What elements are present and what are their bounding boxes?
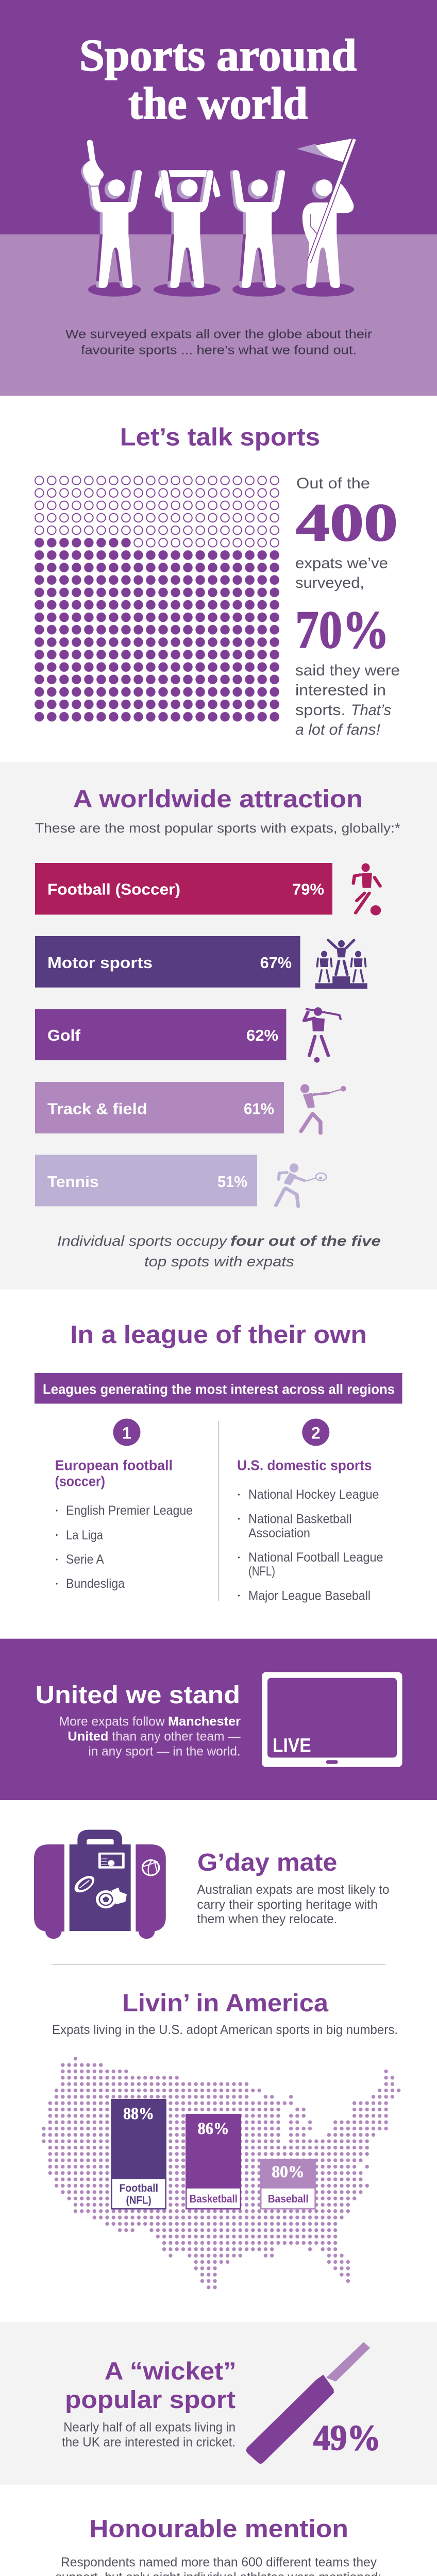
waffle chart: 400 expats (33, 474, 281, 723)
icon: tennis player (276, 1163, 326, 1207)
icon: footballer (354, 863, 381, 916)
heading: popular sport (65, 2386, 236, 2414)
stat text: That’s (351, 702, 391, 719)
bar: football NFL 88%: Football (120, 2182, 158, 2194)
icon: live TV: LIVE (273, 1735, 311, 1757)
body text: Australian expats are most likely to (197, 1883, 390, 1897)
bar: football NFL 88%: (NFL) (126, 2194, 152, 2206)
intro text: Expats living in the U.S. adopt American sports in big numbers. (52, 2023, 398, 2037)
body text: United (68, 1730, 108, 1744)
dot map: United States (41, 2056, 402, 2291)
heading: In a league of their own (70, 1321, 367, 1349)
heading: Honourable mention (89, 2515, 348, 2543)
bar: football: 79% (292, 880, 324, 899)
heading: A “wicket” (105, 2358, 237, 2385)
column: european football: La Liga (66, 1528, 103, 1543)
bar: football NFL 88% (111, 2099, 166, 2210)
column: us domestic sports (237, 1419, 383, 1603)
heading: Let’s talk sports (120, 423, 320, 451)
body text: the UK are interested in cricket. (62, 2435, 236, 2450)
bar: basketball 86%: Basketball (190, 2193, 238, 2205)
column: european football: Bundesliga (66, 1577, 125, 1591)
body text: than any other team — (112, 1730, 241, 1744)
stat text: sports. (295, 702, 346, 719)
panel: g'day mate (34, 1830, 390, 1939)
banner (35, 1373, 402, 1403)
intro text: These are the most popular sports with expats, globally:* (35, 820, 400, 836)
title: Sports around (79, 31, 357, 80)
caption: top spots with expats (144, 1253, 294, 1269)
column: european football: English Premier League (66, 1503, 193, 1518)
panel: united we stand (0, 1639, 437, 1800)
column: us domestic sports: Association (248, 1526, 310, 1540)
bar: football NFL 88%: 88% (123, 2105, 154, 2123)
stat text: Out of the (296, 475, 370, 492)
stat text: surveyed, (295, 574, 364, 591)
caption: four out of the five (230, 1233, 381, 1249)
icon: live TV (262, 1672, 402, 1767)
column: us domestic sports: National Hockey League (248, 1487, 379, 1502)
column: european football (55, 1419, 193, 1591)
heading: Livin’ in America (122, 1990, 328, 2017)
icon: motor sports podium (315, 940, 367, 989)
stat text: a lot of fans! (295, 721, 381, 738)
column: us domestic sports: National Football League (248, 1550, 383, 1565)
bar: baseball 80%: 80% (272, 2163, 305, 2181)
bar: tennis: 51% (217, 1173, 247, 1191)
subtitle: favourite sports ... here’s what we found out. (81, 344, 357, 358)
stat text: said they were (295, 662, 400, 679)
caption (57, 1233, 381, 1269)
panel: a worldwide attraction (0, 762, 437, 1289)
icon: hammer thrower (300, 1084, 346, 1133)
bar: football (35, 863, 332, 914)
bar: baseball 80%: Baseball (268, 2193, 309, 2205)
stat text (295, 475, 400, 738)
bar: golf: Golf (47, 1026, 81, 1044)
column: us domestic sports: 2 (311, 1423, 321, 1442)
subtitle (65, 328, 372, 358)
panel: honourable mention (56, 2519, 380, 2576)
bar: basketball 86%: 86% (198, 2120, 229, 2138)
heading: A worldwide attraction (73, 786, 363, 813)
column: us domestic sports: National Basketball (248, 1512, 351, 1526)
column: us domestic sports: U.S. domestic sports (237, 1458, 372, 1473)
title: the world (128, 79, 308, 129)
icon: suitcase with sport stickers (34, 1830, 166, 1939)
bar: track and field: Track & field (47, 1099, 147, 1117)
heading (65, 2358, 237, 2414)
bar: baseball 80% (260, 2159, 316, 2210)
column: european football: Serie A (66, 1552, 104, 1567)
bar: motor sports: Motor sports (47, 954, 153, 972)
intro text (56, 2555, 381, 2576)
heading: G’day mate (197, 1849, 337, 1876)
subtitle: We surveyed expats all over the globe about their (65, 328, 372, 342)
illustration: four cheering fans (81, 139, 355, 297)
icon: golfer (304, 1007, 341, 1063)
body text (62, 2420, 236, 2450)
stat: 49%: 49% (313, 2418, 381, 2458)
bar: golf (35, 1009, 286, 1060)
stat text: interested in (295, 682, 386, 699)
bar: track and field: 61% (244, 1099, 274, 1117)
bar: football: Football (Soccer) (47, 880, 180, 899)
heading: United we stand (36, 1682, 240, 1709)
bar: basketball 86% (186, 2114, 241, 2210)
body text (197, 1883, 390, 1926)
column: european football: (soccer) (55, 1473, 105, 1489)
bar: motor sports (35, 936, 300, 988)
body text: More expats follow (59, 1715, 165, 1729)
stat text: expats we’ve (295, 555, 388, 572)
body text: them when they relocate. (197, 1912, 337, 1926)
caption: Individual sports occupy (57, 1233, 228, 1249)
body text: Manchester (168, 1715, 241, 1729)
divider (218, 1421, 220, 1601)
stat text: 400 (296, 493, 398, 552)
bar: motor sports: 67% (260, 954, 292, 972)
stat text: 70% (295, 600, 390, 659)
bar: tennis: Tennis (47, 1173, 99, 1191)
panel: let's talk sports (33, 423, 400, 738)
panel: a wicket popular sport (0, 2322, 437, 2485)
panel: hero (0, 0, 437, 396)
intro text: Respondents named more than 600 different teams they (61, 2555, 377, 2570)
column: european football: European football (55, 1458, 173, 1473)
body text (59, 1715, 241, 1759)
body text: carry their sporting heritage with (197, 1897, 378, 1912)
column: us domestic sports: Major League Baseball (248, 1589, 371, 1603)
column: european football: 1 (122, 1423, 131, 1442)
bar: track and field (35, 1082, 284, 1133)
bar: tennis (35, 1155, 257, 1206)
icon: cricket bat (246, 2342, 370, 2464)
panel: in a league of their own (35, 1321, 402, 1603)
body text: in any sport — in the world. (88, 1744, 241, 1759)
body text: Nearly half of all expats living in (63, 2420, 236, 2435)
title (79, 31, 357, 129)
banner: Leagues generating the most interest across all regions (43, 1381, 395, 1397)
column: us domestic sports: (NFL) (248, 1564, 275, 1579)
bar: golf: 62% (246, 1026, 278, 1044)
panel: livin' in america (41, 1990, 402, 2291)
